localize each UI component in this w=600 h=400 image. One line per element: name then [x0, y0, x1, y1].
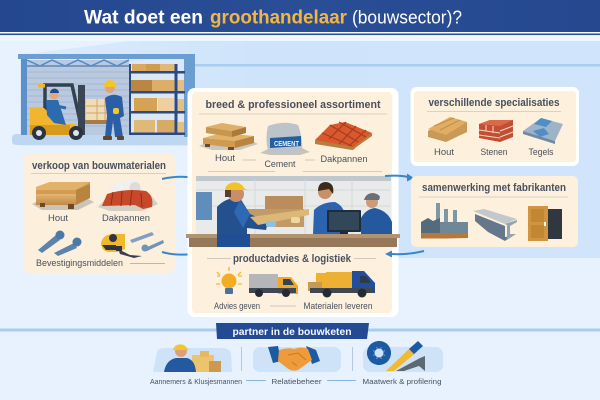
label: Maatwerk & profilering	[362, 377, 442, 386]
icon: hout op pallet	[199, 123, 258, 150]
icon: handdruk	[268, 346, 320, 371]
panel: samenwerking met fabrikanten	[411, 176, 578, 247]
panel: centraal assortiment en logistiek	[186, 88, 400, 317]
houten plank	[250, 209, 309, 225]
icon: vrachtwagen grijs	[249, 274, 298, 297]
arrow: samenwerking naar logistiek	[385, 250, 424, 258]
panel: verschillende specialisaties	[410, 87, 579, 166]
label: cement: Cement	[264, 159, 296, 169]
section divider: partner in de bouwketen: partner in de bouwketen	[232, 327, 352, 338]
medewerker balie	[291, 182, 345, 234]
title	[84, 6, 462, 28]
section divider: partner in de bouwketen	[0, 323, 600, 339]
arrow: verkoop naar logistiek	[162, 250, 201, 258]
icon: vrachtwagen blauw	[308, 271, 375, 298]
label: stenen: Stenen	[480, 147, 508, 157]
item: relatiebeheer	[253, 346, 341, 386]
icon: tegels	[523, 118, 563, 144]
scene: balie met medewerkers	[186, 176, 400, 247]
icon: tandwiel	[367, 341, 391, 365]
forklift	[30, 84, 115, 140]
icon: zaag en hamer	[386, 341, 425, 371]
heading: samenwerking met fabrikanten	[422, 182, 566, 194]
icon: stalen balk	[473, 209, 517, 241]
item: aannemers en klusjesmannen	[150, 344, 242, 386]
medewerker achter computer	[361, 193, 392, 234]
computerscherm	[327, 210, 361, 235]
icon: fabriek	[421, 203, 468, 238]
label: advies geven: Advies geven	[214, 301, 260, 311]
icon: cement	[260, 123, 310, 155]
label: dakpannen: Dakpannen	[320, 154, 368, 164]
label: materialen leveren: Materialen leveren	[304, 301, 372, 311]
shelving with goods	[129, 64, 185, 135]
label: Relatiebeheer	[272, 377, 322, 386]
balie	[186, 234, 400, 247]
title: (bouwsector)?	[352, 8, 462, 28]
icon: cement: CEMENT	[274, 141, 300, 148]
label: dakpannen: Dakpannen	[102, 213, 150, 223]
warehouse worker	[103, 80, 124, 140]
arrow: logistiek naar samenwerking	[385, 174, 414, 182]
item: maatwerk en profilering	[362, 341, 443, 386]
icon: stenen	[479, 120, 513, 142]
icon: schroeven	[38, 230, 82, 256]
heading: assortiment: breed & professioneel assortiment	[206, 99, 381, 111]
icon: meetlint en pluggen	[101, 232, 164, 258]
icon: hout	[32, 182, 94, 210]
icon: hout	[428, 117, 467, 142]
heading: productadvies en logistiek: productadvies & logistiek	[233, 253, 352, 265]
label: bevestigingsmiddelen: Bevestigingsmiddelen	[36, 258, 123, 268]
label: hout: Hout	[48, 213, 69, 223]
icon: dakpannen op pallet	[315, 122, 372, 150]
medewerker met helm	[217, 182, 268, 247]
icon: dakpannen	[98, 179, 158, 211]
heading: verkoop van bouwmaterialen	[32, 160, 166, 172]
icon: deuren	[528, 206, 562, 241]
panel: verkoop van bouwmaterialen	[23, 154, 175, 273]
label: tegels: Tegels	[528, 147, 554, 157]
title: groothandelaar	[210, 6, 347, 28]
icon: aannemer met dozen	[164, 344, 221, 372]
title bar	[0, 0, 600, 35]
heading: verschillende specialisaties	[428, 97, 560, 109]
icon: gloeilamp	[216, 267, 242, 294]
title: Wat doet een	[84, 6, 203, 28]
label: Aannemers & Klusjesmannen	[150, 377, 242, 386]
label: hout: Hout	[434, 147, 455, 157]
arrow: verkoop naar assortiment	[162, 177, 198, 179]
warehouse illustration	[12, 54, 195, 145]
label: hout: Hout	[215, 153, 236, 163]
